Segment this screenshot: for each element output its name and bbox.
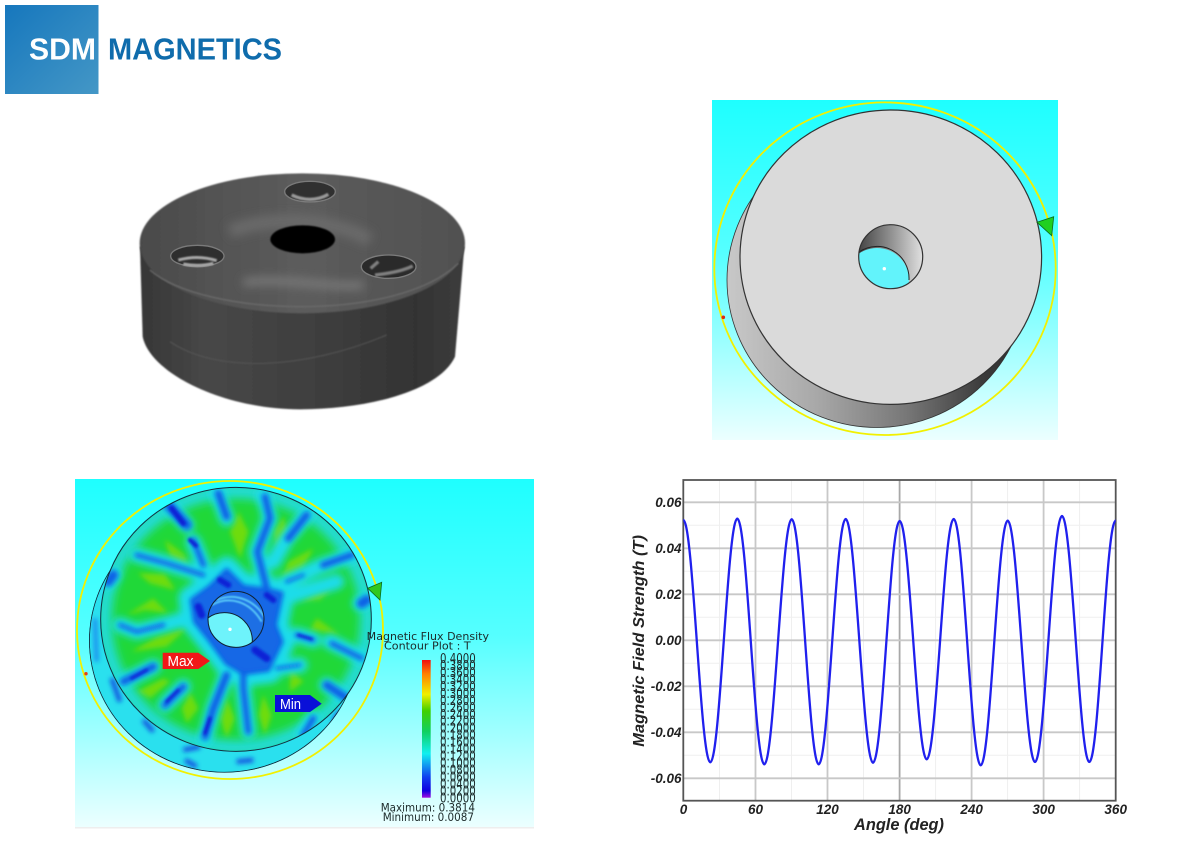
disc contour drawing (83, 487, 371, 782)
x axis title: Angle (deg) (853, 815, 944, 834)
y axis title: Magnetic Field Strength (T) (631, 535, 648, 747)
chart minor grid (683, 480, 1116, 800)
Max arrow label (163, 653, 210, 670)
colour legend values: 0.1600 (440, 736, 476, 751)
green cone marker (368, 582, 382, 600)
y axis tick labels (651, 495, 682, 786)
disc side wall (727, 132, 1027, 428)
logo wordmark SDM: SDM (29, 32, 96, 66)
Min arrow label (275, 695, 322, 713)
recess top (285, 181, 335, 202)
red dot marker (84, 672, 88, 675)
Max arrow label: Max (168, 653, 194, 670)
contour background (75, 479, 534, 827)
x axis tick labels: 300 (1032, 802, 1055, 817)
Min arrow label: Min (280, 696, 301, 713)
chart frame (683, 480, 1116, 801)
magnet top face (140, 173, 465, 313)
colour legend values: 0.1800 (440, 729, 476, 744)
logo: SDM Magnetics (5, 5, 282, 94)
green cone marker (1037, 217, 1054, 236)
disc top edge (101, 487, 371, 751)
centre bore (270, 225, 335, 253)
yellow orbit ring (77, 481, 383, 779)
panel: grey CAD model of ring magnet (712, 100, 1058, 440)
x axis tick labels: 120 (816, 802, 839, 817)
maximum and minimum readout: Maximum: 0.3814 (381, 800, 475, 814)
maximum and minimum readout: Minimum: 0.0087 (383, 810, 474, 824)
x axis tick labels: 240 (959, 802, 983, 817)
CAD background (712, 100, 1058, 440)
blue flux minima (108, 493, 367, 737)
colour legend values: 0.3600 (440, 666, 476, 681)
colour legend values: 0.3200 (440, 680, 476, 695)
x axis tick labels: 60 (748, 802, 763, 817)
colour legend values: 0.1000 (440, 757, 476, 772)
colour legend values: 0.3400 (440, 673, 476, 688)
y axis tick labels: 0.00 (655, 633, 682, 648)
colour legend values: 0.0200 (440, 784, 476, 800)
colour legend values: 0.1400 (440, 743, 476, 758)
contour plot title: Contour Plot : T (384, 640, 471, 652)
colour legend bar (422, 660, 431, 798)
dark blue flux cores (132, 508, 312, 733)
y axis tick labels: 0.06 (655, 495, 682, 510)
colour legend values: 0.2800 (440, 694, 476, 709)
magnet side wall (140, 247, 464, 409)
field strength curve (683, 516, 1116, 765)
red dot marker (722, 316, 725, 319)
y axis tick labels: -0.06 (651, 771, 682, 786)
colour legend values: 0.2400 (440, 708, 476, 723)
colour legend values: 0.3000 (440, 687, 476, 702)
centre hole (208, 590, 264, 648)
recess right (361, 255, 416, 278)
colour legend values: 0.2200 (440, 715, 476, 730)
yellow orbit ring (714, 102, 1056, 435)
y axis tick labels: -0.04 (651, 725, 682, 740)
x axis tick labels (680, 802, 1127, 817)
outer cyan rim (104, 491, 368, 748)
bright green cores (127, 512, 340, 738)
disc top face contour (101, 487, 371, 751)
colour legend values: 0.2000 (440, 722, 476, 737)
colour legend values: 0.3800 (440, 659, 476, 674)
product photo: black ring magnet (140, 173, 465, 409)
colour legend values: 0.0600 (440, 770, 476, 786)
y axis tick labels: -0.02 (651, 679, 682, 694)
colour legend values: 0.0800 (440, 764, 476, 778)
colour legend values: 0.1200 (440, 750, 476, 765)
line chart: magnetic field strength vs angle (631, 480, 1127, 834)
contour plot title: Magnetic Flux Density (367, 630, 489, 643)
disc side wall contour (89, 570, 348, 773)
centre hole (858, 224, 924, 290)
cyan halo around flux streaks (107, 492, 368, 738)
colour legend values: 0.4000 (440, 652, 476, 667)
chart major grid (683, 480, 1116, 800)
colour legend values: 0.2600 (440, 701, 476, 716)
logo square (5, 5, 98, 94)
colour legend values: 0.0000 (440, 791, 476, 806)
disc top face (740, 110, 1042, 404)
recess left (171, 245, 224, 267)
x axis tick labels: 180 (888, 802, 911, 817)
maximum and minimum readout (381, 800, 475, 824)
y axis tick labels: 0.02 (655, 587, 682, 602)
panel: magnetic flux density contour plot (75, 479, 534, 828)
logo wordmark MAGNETICS: MAGNETICS (108, 32, 282, 66)
y axis tick labels: 0.04 (655, 541, 682, 556)
colour legend values (440, 652, 476, 806)
contour plot title (367, 630, 489, 652)
colour legend values: 0.0400 (440, 778, 476, 792)
x axis tick labels: 360 (1104, 802, 1127, 817)
x axis tick labels: 0 (680, 802, 688, 817)
